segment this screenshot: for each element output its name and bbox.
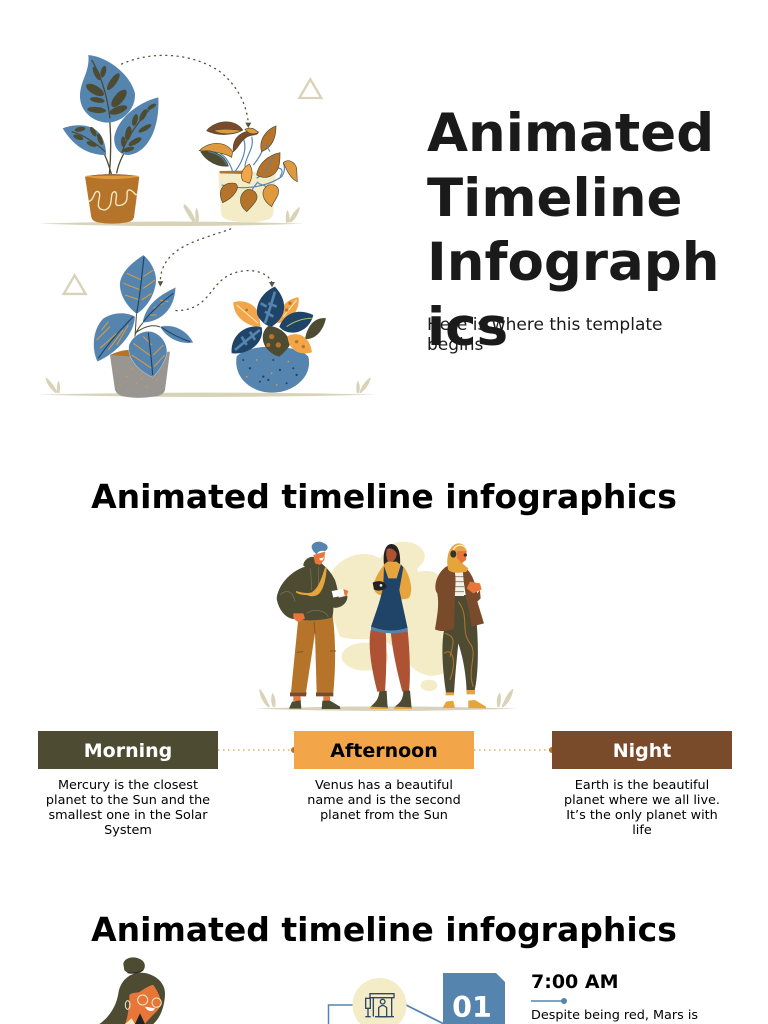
text: Afternoon: Venus has a beautiful	[315, 778, 453, 793]
triangles	[64, 79, 321, 294]
label: Afternoon: Afternoon	[330, 740, 438, 762]
plant 3	[94, 255, 193, 398]
plant 2	[199, 122, 297, 222]
text: Morning	[46, 778, 210, 838]
section heading 2: Animated timeline infographics	[91, 910, 677, 949]
main title	[427, 103, 719, 358]
number 01: 01	[452, 991, 492, 1024]
text: Morning: System	[104, 823, 152, 838]
text: Night: Earth is the beautiful	[575, 778, 709, 793]
label: Night: Night	[613, 740, 671, 762]
illustration: three people	[254, 542, 516, 711]
text: Morning: smallest one in the Solar	[48, 808, 208, 823]
text: Morning: Mercury is the closest	[58, 778, 198, 793]
label: Afternoon	[294, 731, 474, 769]
number tab	[443, 973, 505, 1024]
text: Night: planet where we all live.	[564, 793, 720, 808]
subtitle	[427, 315, 662, 355]
dotted arrows	[122, 55, 272, 311]
text: Night: It’s the only planet with	[566, 808, 718, 823]
main title: ics	[427, 297, 508, 358]
pot	[85, 174, 139, 224]
main title: Animated	[427, 103, 714, 164]
subtitle: Here is where this template	[427, 315, 662, 335]
plant 4	[232, 287, 326, 393]
text: Afternoon: planet from the Sun	[320, 808, 448, 823]
label: Night	[552, 731, 732, 769]
text: Night: life	[632, 823, 652, 838]
text: Night	[564, 778, 720, 838]
person 2	[370, 544, 412, 709]
person 1	[277, 542, 348, 709]
subtitle: begins	[427, 335, 483, 355]
plant 1	[63, 55, 158, 224]
section heading 1: Animated timeline infographics	[91, 477, 677, 516]
shelves	[38, 204, 377, 397]
illustration: woman	[100, 957, 165, 1024]
time heading: 7:00 AM	[531, 971, 618, 993]
timeline connectors	[218, 747, 552, 753]
illustration: potted plants	[40, 54, 375, 398]
label: Morning: Morning	[84, 740, 172, 762]
text: Afternoon: name and is the second	[307, 793, 461, 808]
icon: bus stop	[352, 978, 406, 1024]
text: Afternoon	[307, 778, 461, 823]
text: Morning: planet to the Sun and the	[46, 793, 210, 808]
timeline: 7:00 AM	[328, 973, 567, 1024]
person 3	[435, 543, 486, 708]
description: Despite being red, Mars is	[531, 1008, 698, 1023]
label: Morning	[38, 731, 218, 769]
main title: Infograph	[427, 232, 719, 293]
main title: Timeline	[427, 168, 683, 229]
